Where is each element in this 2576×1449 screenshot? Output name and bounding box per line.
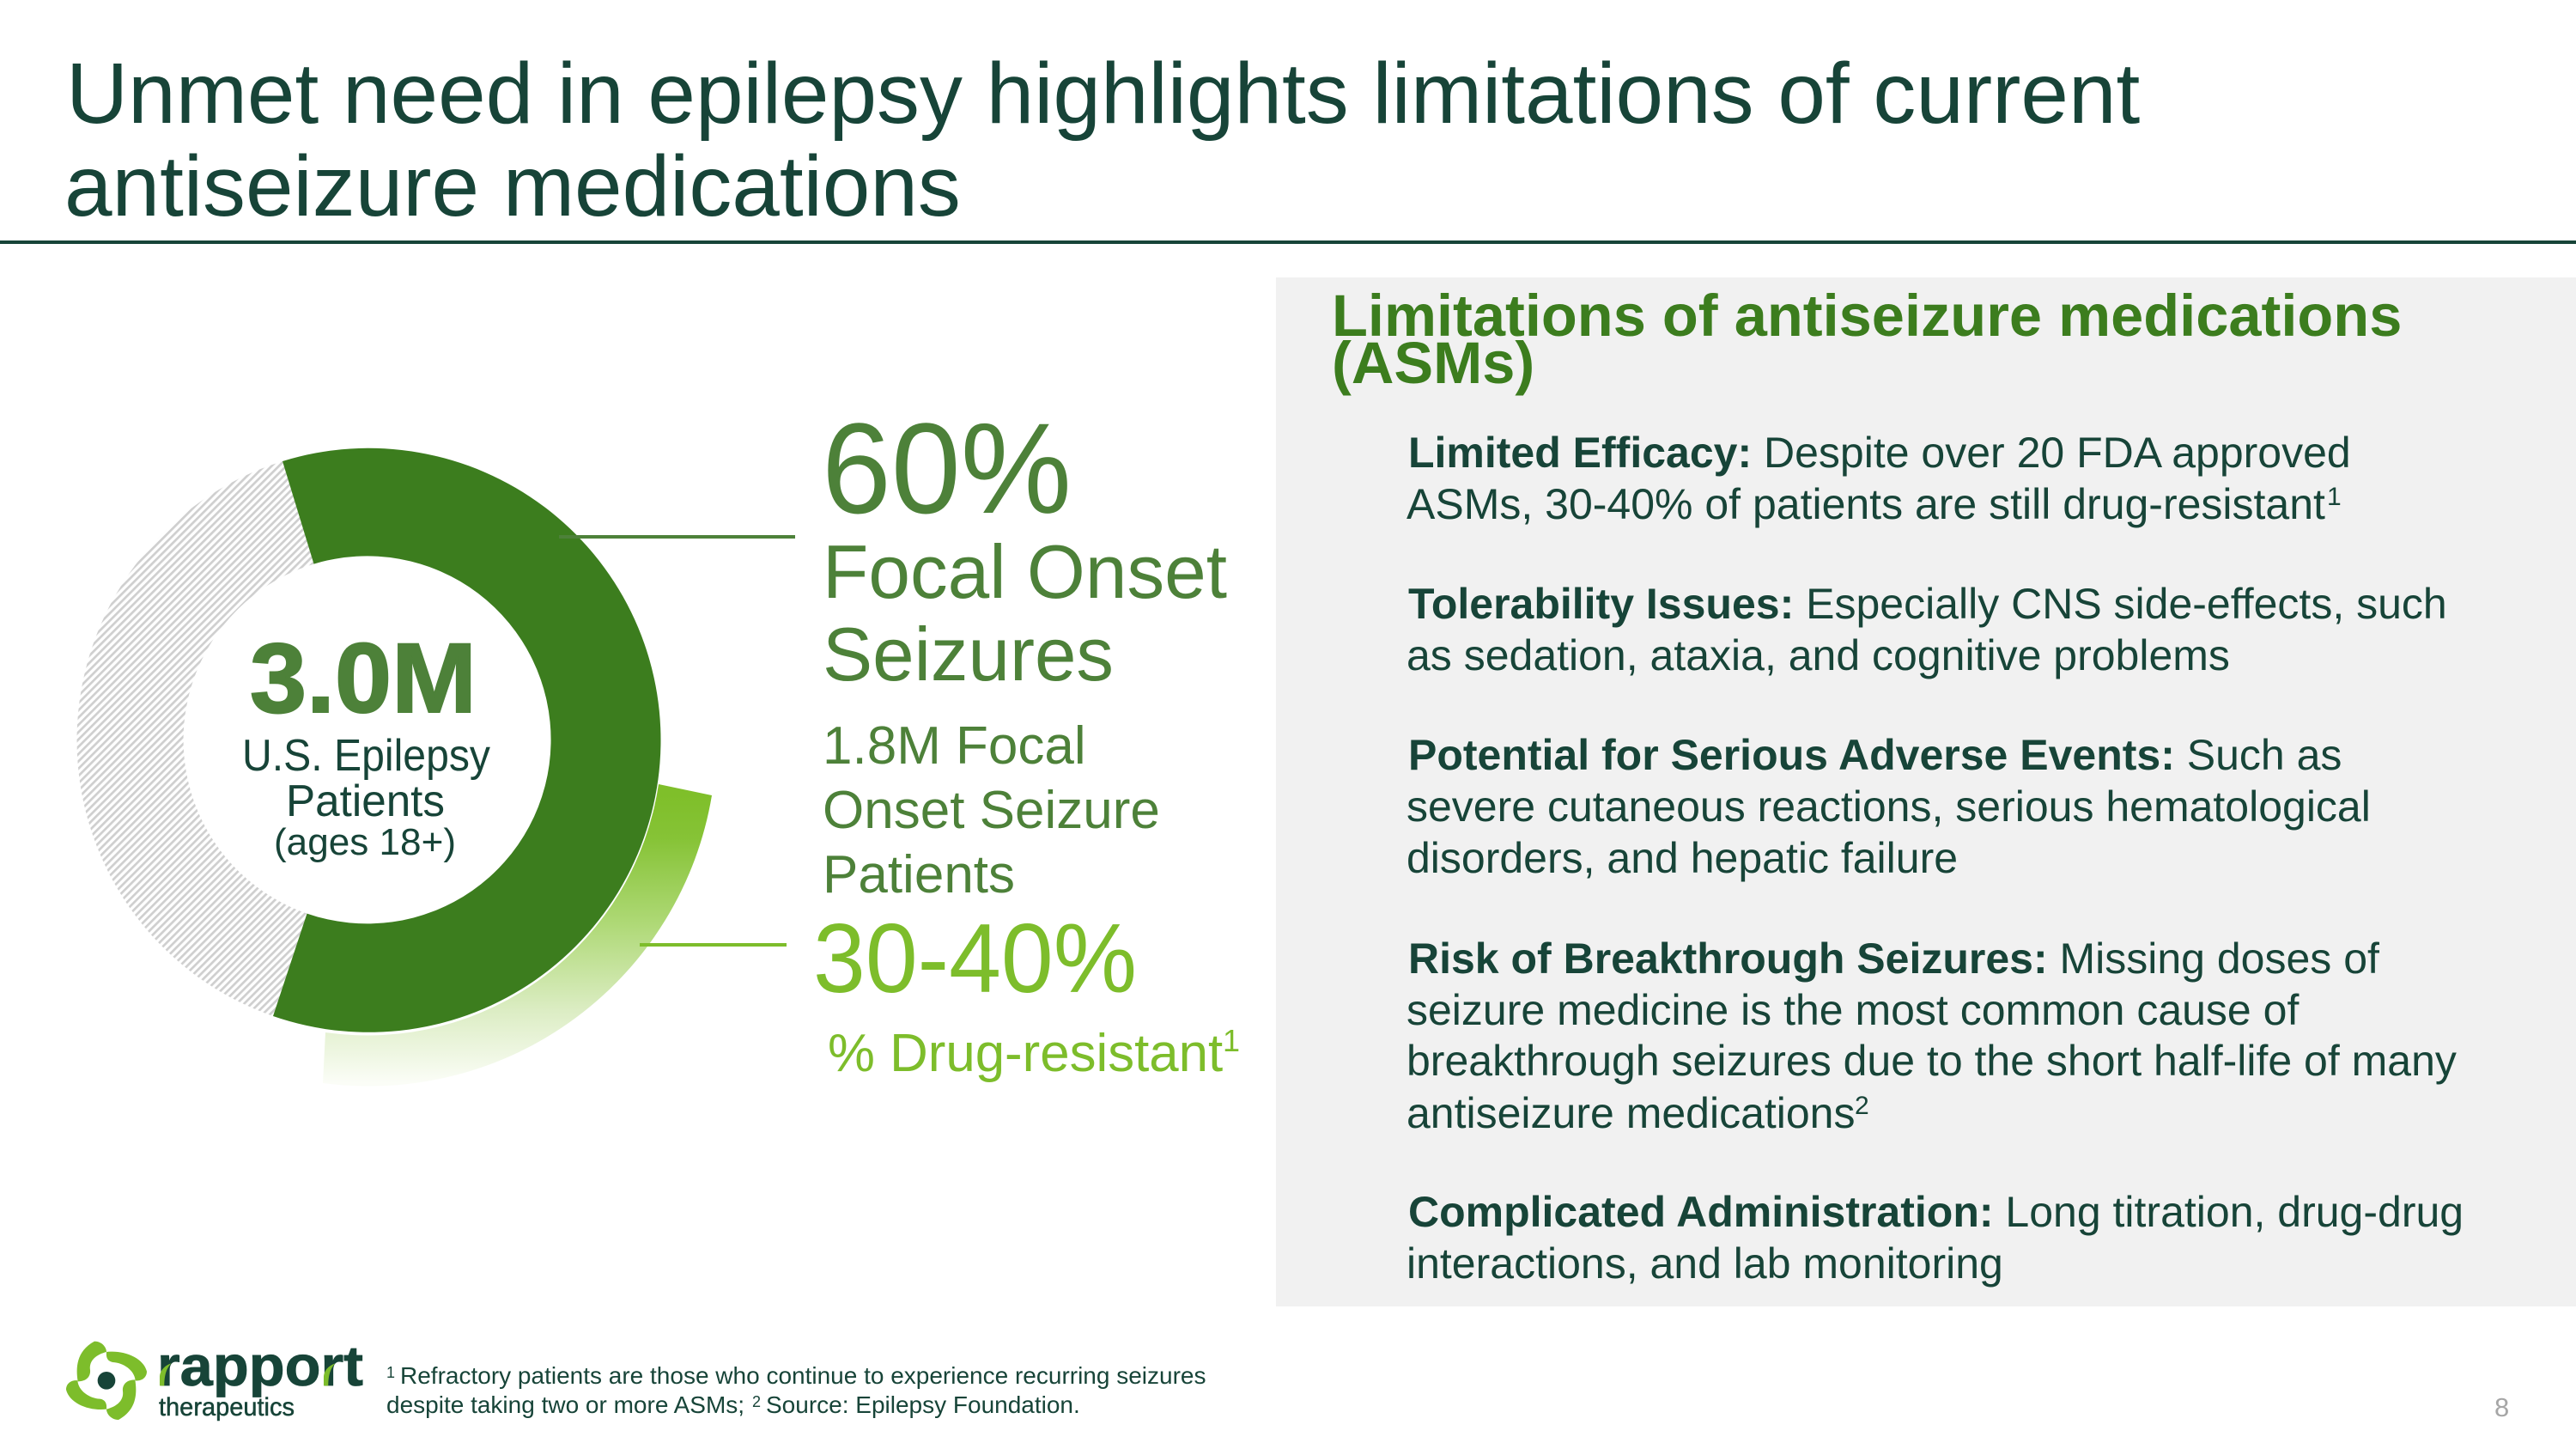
logo wordmark accents — [160, 1363, 335, 1385]
footnote: 1 — [386, 1364, 395, 1381]
stat: 60% focal onset seizures: 1.8M Focal — [823, 716, 1086, 776]
footnote: 2 — [752, 1393, 761, 1410]
donut chart: 3.0M U.S. epilepsy patients — [77, 448, 712, 1087]
page number: 8 — [2494, 1392, 2509, 1422]
title — [64, 46, 2141, 234]
limitation: breakthrough seizures: seizure medicine is the most common cause of — [1406, 986, 2299, 1034]
logo: rapport therapeutics — [66, 1334, 363, 1422]
title: Unmet need in epilepsy highlights limitations of current — [66, 46, 2141, 142]
stat: 30-40% drug-resistant: 1 — [1223, 1023, 1240, 1058]
remaining patients segment — [77, 461, 314, 1016]
limitation: limited efficacy — [1406, 429, 2351, 528]
limitation: tolerability issues — [1406, 580, 2447, 679]
limitation: serious adverse events: Potential for Serious Adverse Events: Such as — [1408, 731, 2342, 779]
focal onset segment — [273, 448, 661, 1032]
logo tagline: therapeutics — [159, 1393, 295, 1422]
limitation: breakthrough seizures — [1406, 935, 2457, 1137]
limitation: complicated administration: Complicated Administration: Long titration, drug-drug — [1408, 1188, 2464, 1236]
stat: 60% focal onset seizures: 60% — [822, 396, 1072, 540]
panel heading: (ASMs) — [1332, 330, 1534, 396]
limitation: tolerability issues: as sedation, ataxia, and cognitive problems — [1406, 631, 2230, 679]
stat: 60% focal onset seizures — [822, 396, 1227, 904]
donut center label: U.S. Epilepsy — [242, 731, 490, 781]
stat: 30-40% drug-resistant: % Drug-resistant — [828, 1024, 1223, 1083]
footnote — [386, 1362, 1206, 1418]
drug-resistant arc — [323, 784, 712, 1087]
footnote: despite taking two or more ASMs; — [386, 1391, 744, 1418]
title: antiseizure medications — [64, 139, 961, 234]
donut center label: 3.0M — [250, 624, 477, 734]
stat: 60% focal onset seizures: Focal Onset — [823, 529, 1227, 614]
footnote: Source: Epilepsy Foundation. — [766, 1391, 1080, 1418]
limitation: complicated administration — [1406, 1188, 2464, 1288]
limitation: serious adverse events: disorders, and hepatic failure — [1406, 834, 1958, 882]
limitation: limited efficacy: Limited Efficacy: Despite over 20 FDA approved — [1408, 429, 2351, 477]
limitation: serious adverse events: severe cutaneous reactions, serious hematological — [1406, 782, 2371, 831]
donut center label — [242, 624, 490, 863]
limitation: breakthrough seizures: Risk of Breakthrough Seizures: Missing doses of — [1408, 935, 2379, 983]
limitation: breakthrough seizures: antiseizure medications — [1406, 1089, 1855, 1137]
limitation: limited efficacy: 1 — [2327, 483, 2342, 511]
logo icon — [66, 1342, 147, 1420]
panel heading — [1332, 283, 2402, 396]
stat: 30-40% drug-resistant — [813, 904, 1240, 1083]
limitation: tolerability issues: Tolerability Issues: Especially CNS side-effects, such — [1408, 580, 2447, 628]
limitation: complicated administration: interactions, and lab monitoring — [1406, 1239, 2003, 1288]
limitation: limited efficacy: ASMs, 30-40% of patients are still drug-resistant — [1406, 480, 2325, 528]
panel: limitations of ASMs — [1276, 277, 2576, 1306]
leader line: drug-resistant — [640, 943, 787, 947]
stat: 60% focal onset seizures: Onset Seizure — [823, 781, 1160, 840]
stat: 30-40% drug-resistant: 30-40% — [813, 904, 1137, 1014]
donut center label: (ages 18+) — [274, 821, 456, 863]
limitation: serious adverse events — [1406, 731, 2371, 882]
panel heading: Limitations of antiseizure medications — [1332, 283, 2402, 349]
stat: 60% focal onset seizures: Patients — [823, 845, 1015, 904]
logo wordmark: rapport — [157, 1334, 363, 1397]
stat: 60% focal onset seizures: Seizures — [823, 612, 1114, 697]
limitation: breakthrough seizures: 2 — [1855, 1092, 1869, 1120]
footnote: Refractory patients are those who continue to experience recurring seizures — [400, 1362, 1206, 1389]
leader line: focal onset — [559, 535, 795, 539]
donut center label: Patients — [286, 776, 445, 826]
limitation: breakthrough seizures: breakthrough seizures due to the short half-life of many — [1406, 1037, 2457, 1085]
